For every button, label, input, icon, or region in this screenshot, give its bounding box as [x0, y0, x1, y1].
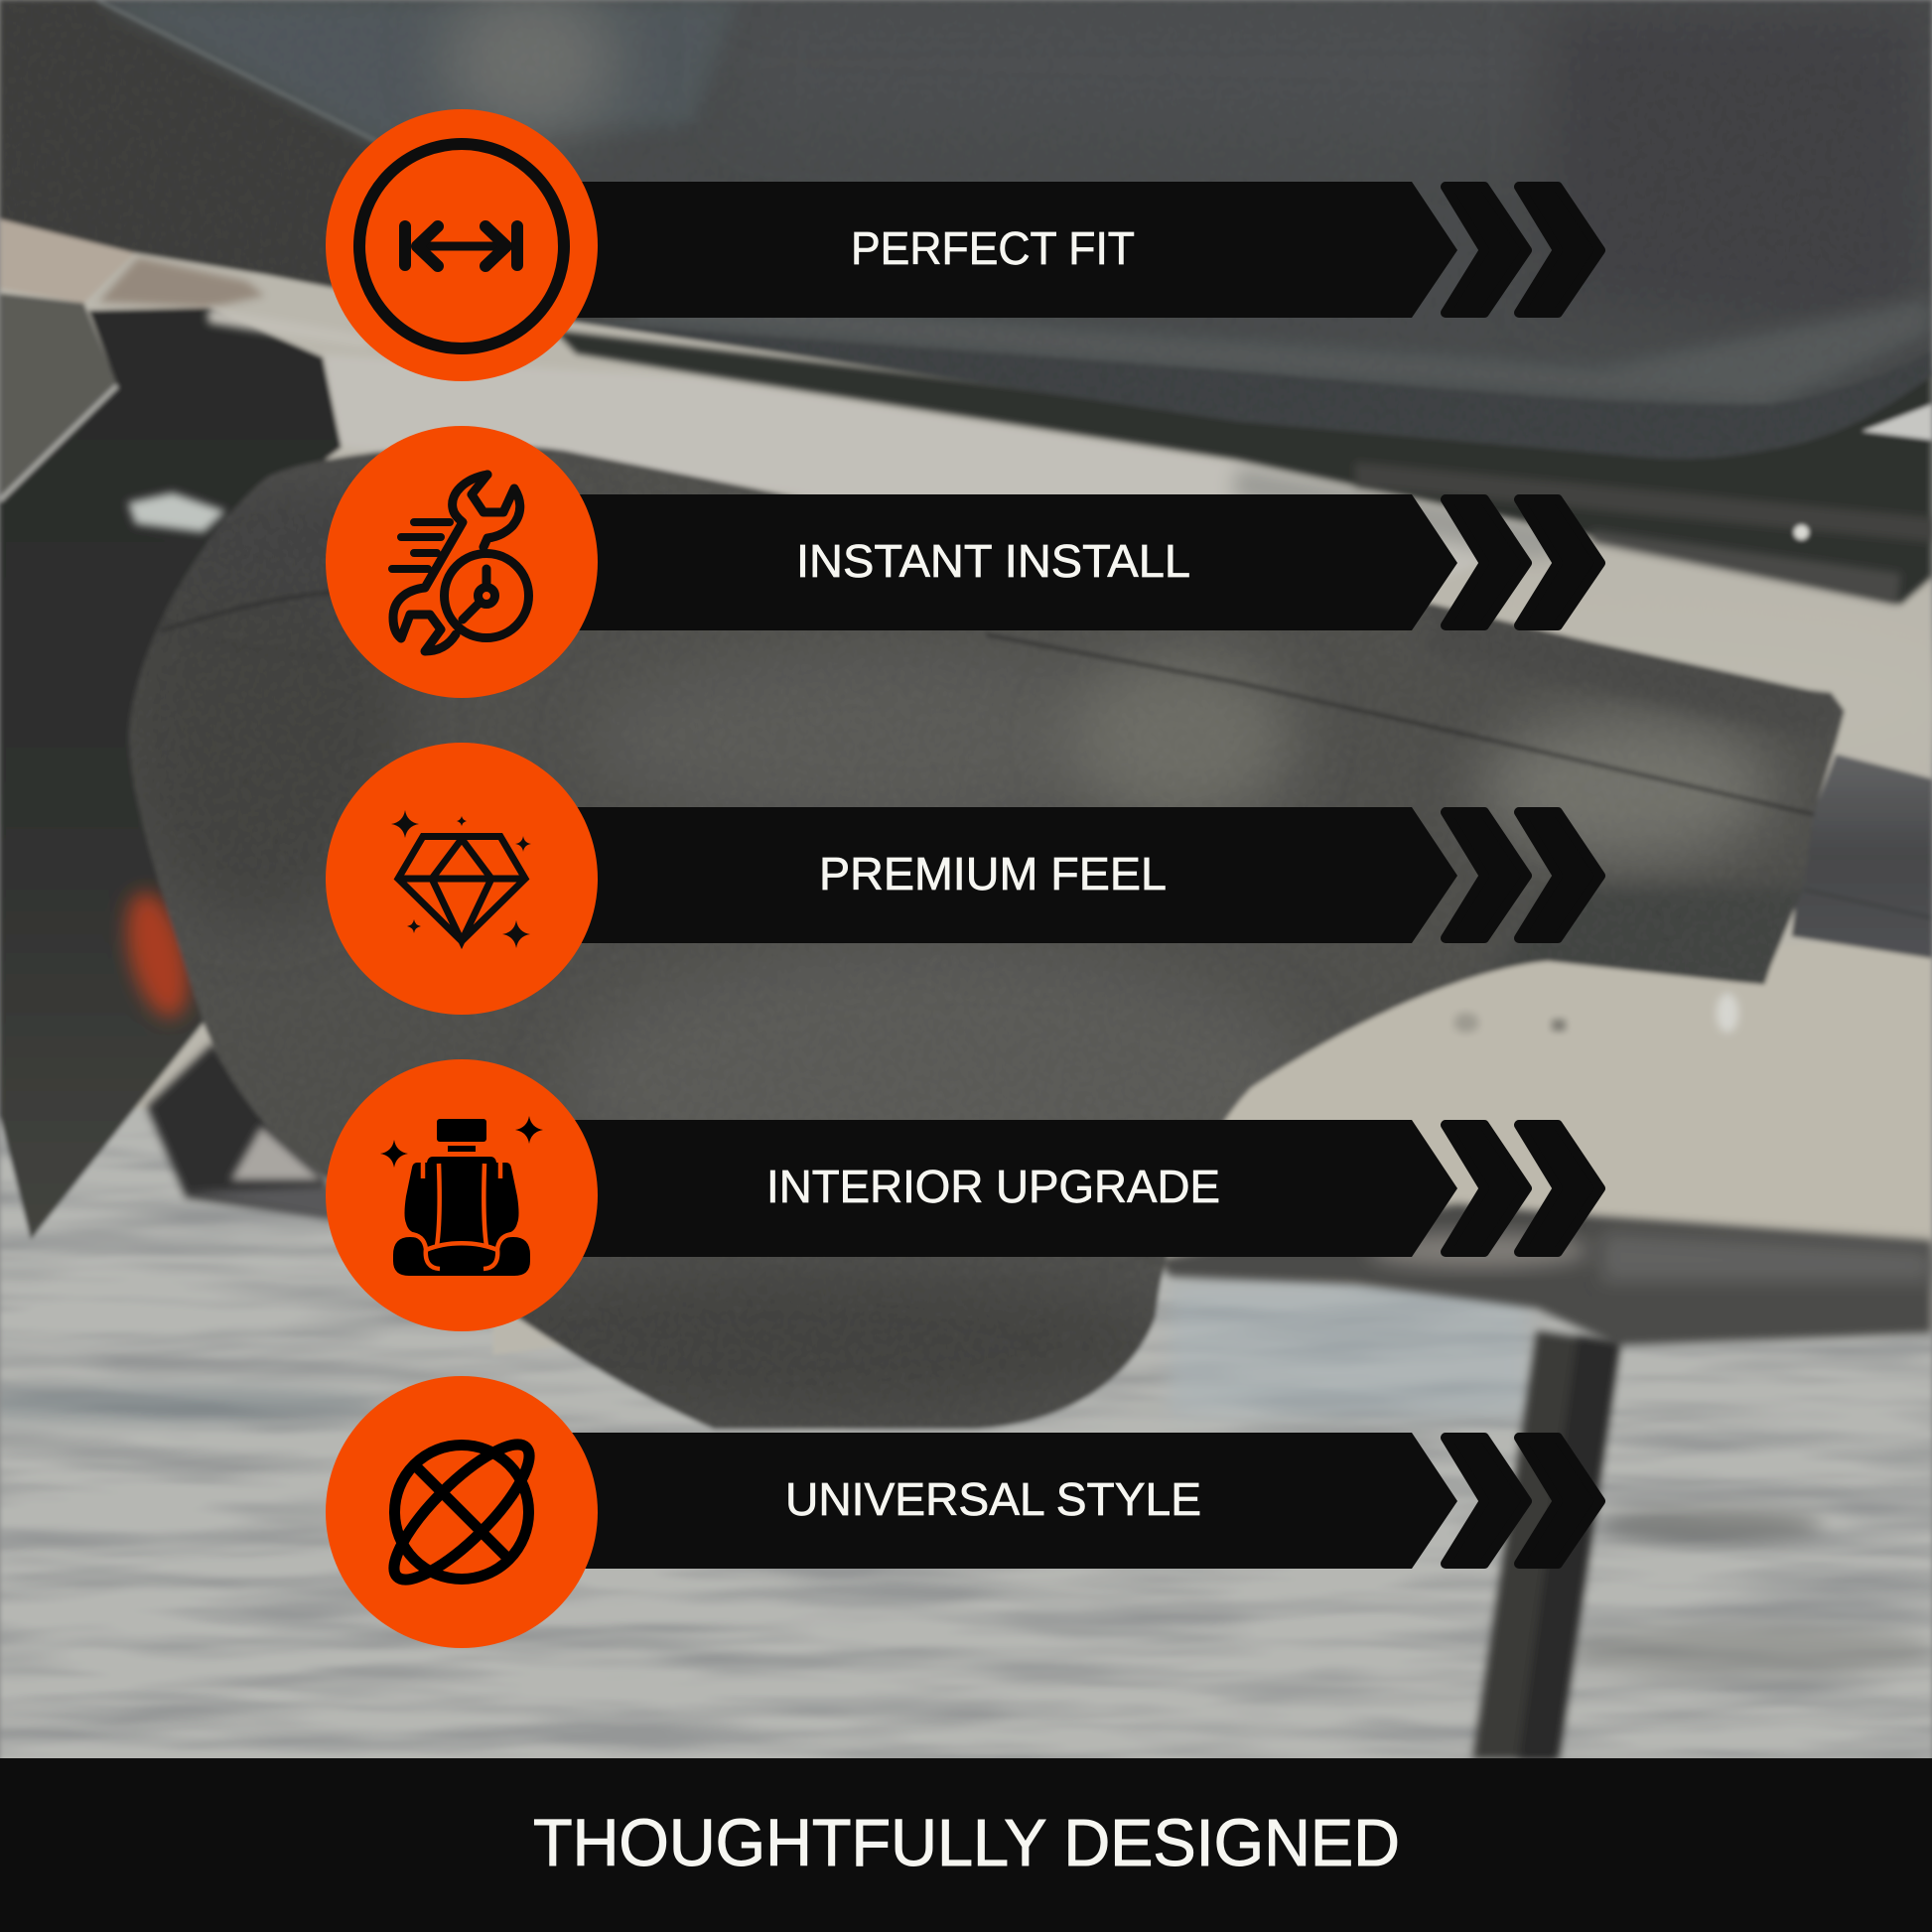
upper seat panel: [0, 0, 1932, 492]
icon: diamond with sparkles: [391, 810, 531, 948]
dark strip under wall: [1156, 1204, 1932, 1345]
label: PREMIUM FEEL: [819, 848, 1167, 899]
seat left dark section: [0, 0, 640, 321]
cushion seam: [160, 589, 1814, 814]
chevrons: [1446, 187, 1600, 313]
armrest cushion: [111, 431, 1849, 1436]
label: INSTANT INSTALL: [796, 535, 1190, 587]
bluish leather: [97, 0, 740, 142]
wall lower right: [1171, 936, 1932, 1244]
arrow bar: [556, 182, 1457, 318]
grey side plate: [0, 293, 117, 499]
row 4: interior upgrade: [326, 1059, 1600, 1331]
icon circle: [326, 1376, 598, 1648]
icon circle: [326, 109, 598, 381]
wall spots: [1453, 1013, 1478, 1033]
icon circle: [326, 743, 598, 1015]
seat grain: [0, 0, 1932, 469]
leather grain: [123, 431, 1849, 1436]
arrow bar: [556, 807, 1457, 943]
light rail: [208, 308, 369, 347]
beige panel: [0, 219, 136, 303]
bright sill under seat: [323, 354, 1540, 610]
floor streaks: [0, 1109, 1932, 1762]
light wedge: [230, 1126, 323, 1180]
row 2: instant install: [326, 426, 1600, 698]
chevrons: [1446, 1125, 1600, 1252]
icon: wrench and clock: [392, 475, 528, 651]
icon: width arrows in ring: [359, 144, 564, 348]
black rail under seat: [554, 331, 1932, 604]
bottom band: [0, 1758, 1932, 1932]
label: PERFECT FIT: [851, 222, 1135, 274]
chevrons: [1446, 1438, 1600, 1564]
label: INTERIOR UPGRADE: [766, 1161, 1220, 1212]
crease line: [97, 0, 377, 142]
floor frame: [1472, 1330, 1619, 1759]
icon circle: [326, 1059, 598, 1331]
icon: car seat with sparkles: [380, 1116, 543, 1276]
rear dark shape under cushion: [147, 1042, 333, 1217]
arrow bar: [556, 1433, 1457, 1569]
icon circle: [326, 426, 598, 698]
chevrons: [1446, 499, 1600, 625]
floor: [0, 1109, 1932, 1762]
white bracket spot: [128, 492, 225, 532]
row 3: premium feel: [326, 743, 1600, 1015]
icon: planet globe: [377, 1428, 546, 1596]
arrow bar: [556, 1120, 1457, 1257]
chevrons: [1446, 812, 1600, 938]
label: UNIVERSAL STYLE: [785, 1473, 1201, 1525]
red glow: [116, 887, 200, 1024]
light corner and bolt: [1862, 404, 1932, 440]
metal rod: [1792, 755, 1932, 959]
left machinery and dark panel: [0, 308, 342, 1240]
beige blur: [98, 257, 265, 308]
arrow bar: [556, 494, 1457, 630]
row 1: perfect fit: [326, 109, 1600, 381]
lower bevel: [579, 290, 1932, 404]
footer title: THOUGHTFULLY DESIGNED: [533, 1806, 1400, 1880]
row 5: universal style: [326, 1376, 1600, 1648]
